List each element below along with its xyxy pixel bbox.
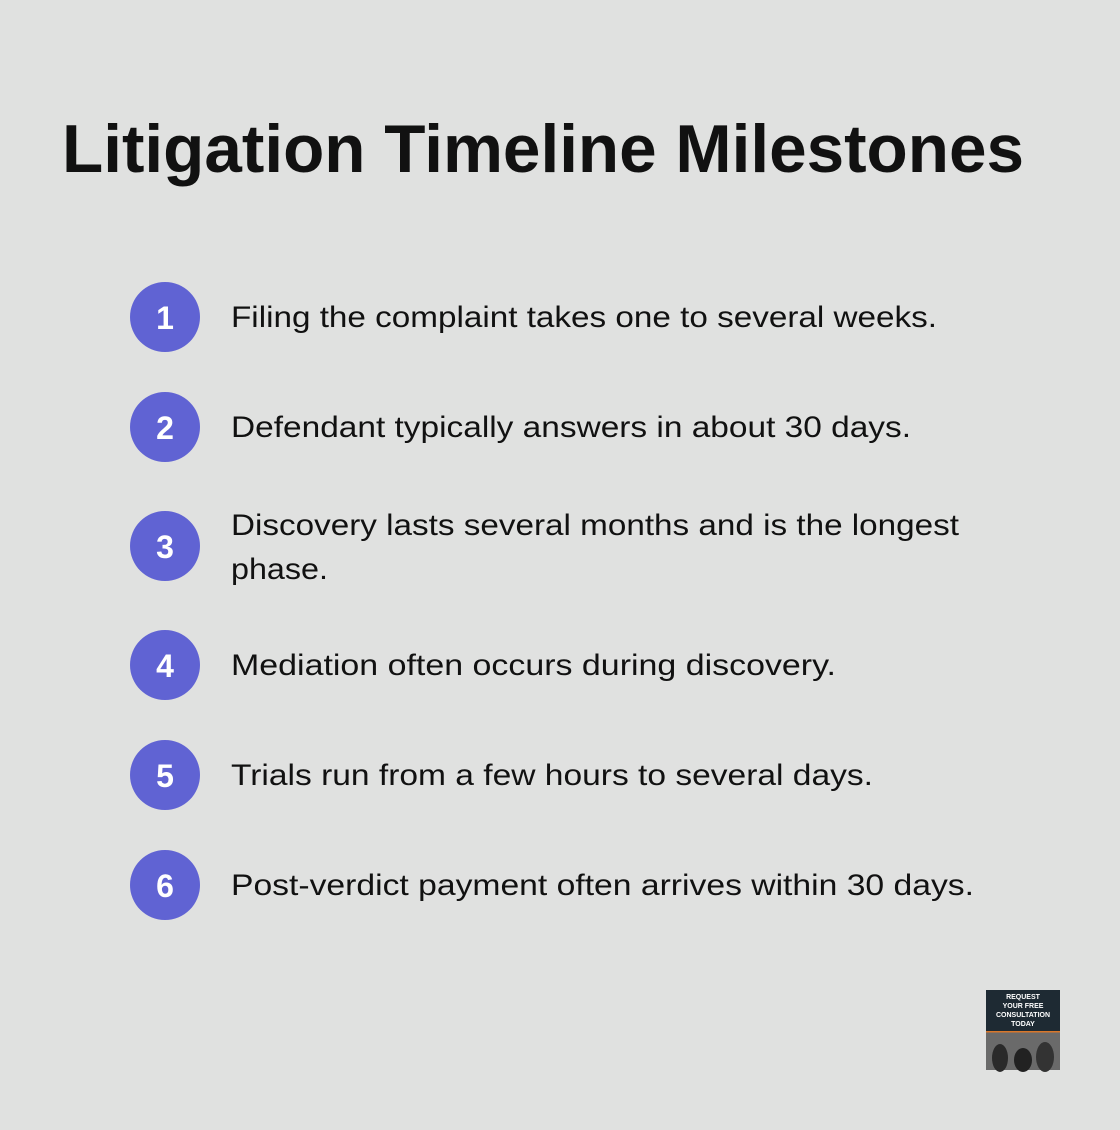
item 2: Defendant typically answers in about 30 days. [231, 411, 911, 444]
item 2 [130, 392, 911, 462]
item 3: 3 [156, 529, 174, 565]
item 6: 6 [156, 868, 174, 904]
item 6: Post-verdict payment often arrives within 30 days. [231, 869, 974, 902]
item 1: Filing the complaint takes one to several weeks. [231, 301, 937, 334]
item 4 [130, 630, 836, 700]
item 5: Trials run from a few hours to several days. [231, 759, 873, 792]
logo badge: CONSULTATION [996, 1012, 1050, 1019]
title: Litigation Timeline Milestones [62, 111, 1024, 187]
item 1 [130, 282, 937, 352]
item 3 [130, 509, 960, 586]
item 3: Discovery lasts several months and is the longest [231, 509, 960, 542]
item 6 [130, 850, 974, 920]
item 5 [130, 740, 873, 810]
item 4: 4 [156, 648, 174, 684]
logo badge: REQUEST [1006, 994, 1041, 1001]
logo badge: TODAY [1011, 1021, 1035, 1028]
item 4: Mediation often occurs during discovery. [231, 649, 836, 682]
item 2: 2 [156, 410, 174, 446]
logo badge [986, 990, 1060, 1072]
logo badge: YOUR FREE [1003, 1003, 1044, 1010]
item 3: phase. [231, 553, 328, 586]
item 1: 1 [156, 300, 174, 336]
item 5: 5 [156, 758, 174, 794]
